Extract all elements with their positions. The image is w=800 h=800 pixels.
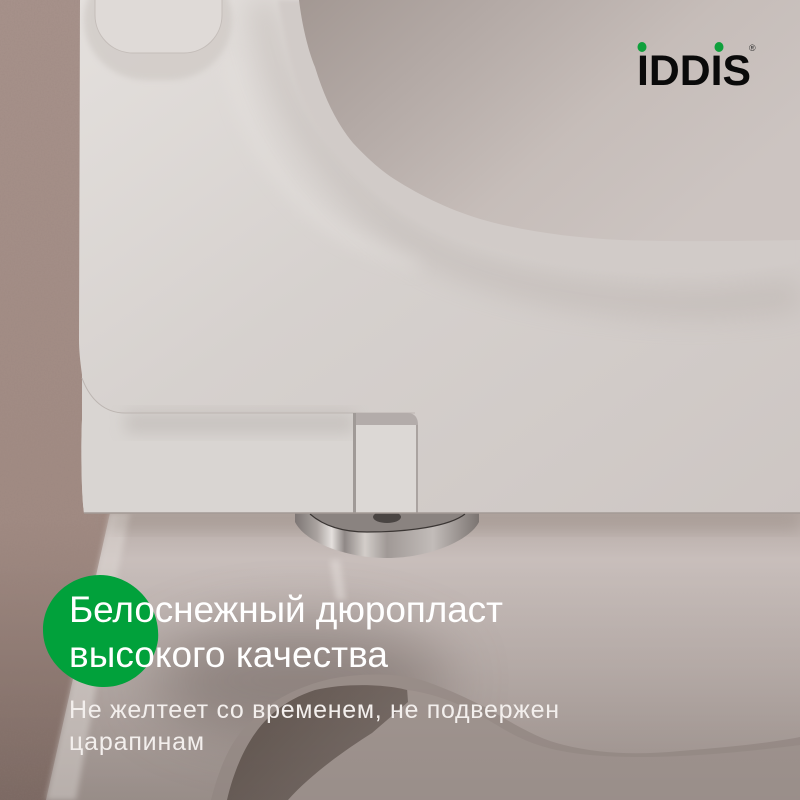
bowl opening bbox=[211, 674, 800, 800]
chrome hinge base bbox=[295, 511, 479, 558]
hinge cover bbox=[353, 413, 418, 513]
subtitle bbox=[69, 696, 559, 756]
heading: Белоснежный дюропласт bbox=[69, 589, 503, 630]
toilet bowl ceramic bbox=[46, 513, 800, 800]
seat rim around bowl bbox=[232, 0, 800, 303]
hinge-side lower seat band bbox=[81, 378, 415, 513]
seat release button bbox=[84, 0, 232, 80]
logo: IDDIS bbox=[637, 47, 751, 95]
logo: ® bbox=[749, 43, 756, 53]
bolt bbox=[373, 511, 401, 523]
bowl interior bbox=[299, 0, 800, 241]
subtitle: царапинам bbox=[69, 728, 204, 756]
heading: высокого качества bbox=[69, 634, 388, 675]
subtitle: Не желтеет со временем, не подвержен bbox=[69, 696, 559, 724]
toilet seat lid bbox=[79, 0, 800, 513]
bottom shade bbox=[0, 560, 800, 800]
heading bbox=[69, 589, 503, 675]
green blob bbox=[43, 575, 158, 687]
